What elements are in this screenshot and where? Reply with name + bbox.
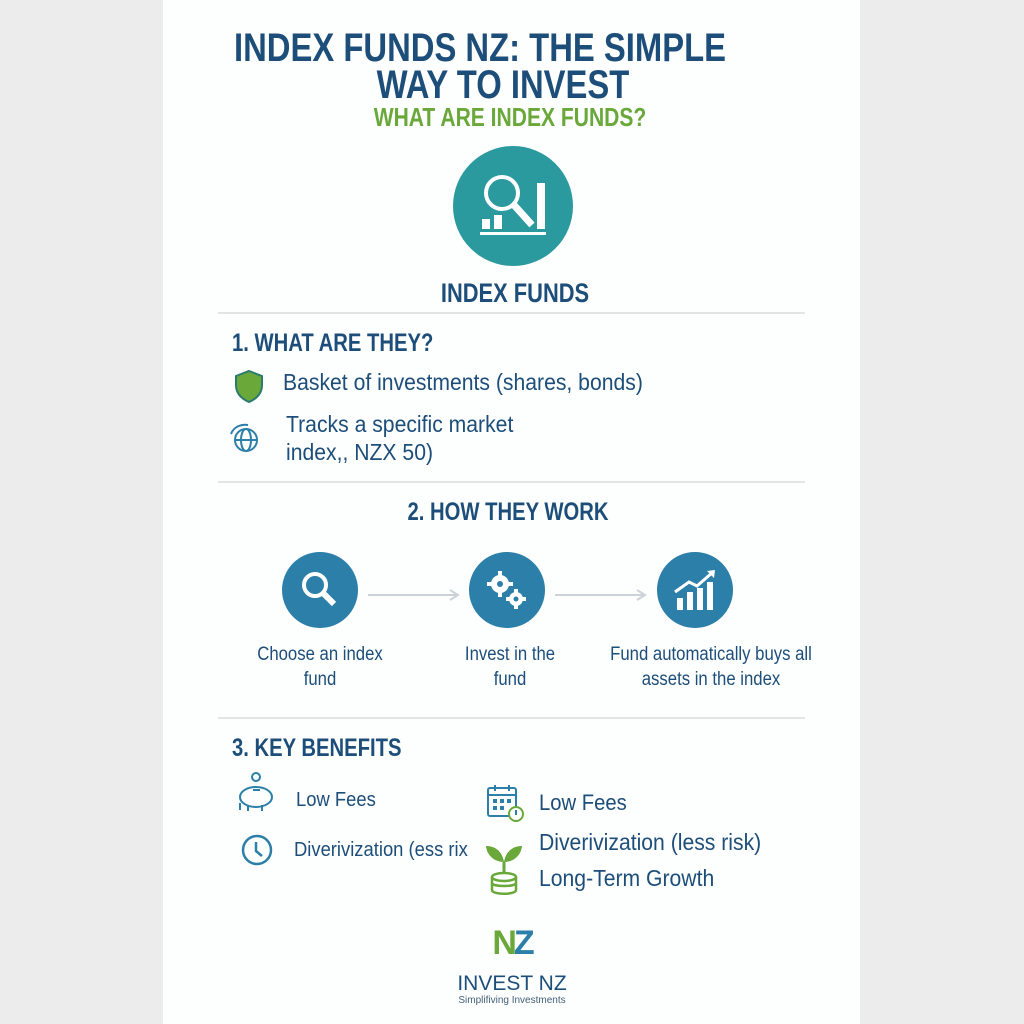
icon: globe	[230, 424, 258, 452]
card background	[163, 0, 860, 1024]
icon: magnifier	[282, 552, 358, 628]
text: long-term growth: Long-Term Growth	[539, 865, 714, 891]
step 3	[610, 552, 812, 690]
benefit: piggy low fees	[239, 772, 376, 811]
label	[257, 644, 383, 690]
text: tracks: index,, NZX 50)	[286, 439, 433, 465]
title	[234, 26, 726, 107]
label: Choose an index	[257, 644, 383, 665]
label: Invest in the	[465, 644, 555, 665]
text: Diverivization (ess rix	[294, 839, 468, 861]
icon: piggy bank	[239, 772, 273, 811]
title: INDEX FUNDS NZ: THE SIMPLE	[234, 26, 726, 70]
text: Low Fees	[296, 789, 376, 811]
arrow 1	[368, 589, 460, 601]
heading: index funds: INDEX FUNDS	[441, 278, 589, 308]
text: diversification right: Diverivization (less risk)	[539, 829, 761, 855]
icon: growth chart	[657, 552, 733, 628]
icon: shield	[235, 370, 263, 403]
benefit: calendar low fees	[487, 785, 627, 822]
benefit: clock diversification	[242, 834, 468, 866]
step 2	[465, 552, 555, 690]
icon: plant on coins	[486, 846, 522, 895]
logo	[457, 924, 567, 1006]
text: basket: Basket of investments (shares, bonds)	[283, 369, 643, 395]
arrow 2	[555, 589, 647, 601]
tagline: Simplifiving Investments	[458, 995, 566, 1006]
text: Low Fees	[539, 790, 627, 815]
label: assets in the index	[642, 669, 780, 690]
label: fund	[494, 669, 526, 690]
logo text: INVEST NZ	[457, 972, 567, 995]
text: tracks	[286, 411, 514, 465]
title: WAY TO INVEST	[377, 63, 629, 107]
icon: calendar	[487, 785, 524, 822]
label: fund	[304, 669, 336, 690]
step 1	[257, 552, 383, 690]
section 1 heading: 1. WHAT ARE THEY?	[232, 329, 433, 357]
section 3 heading: 3. KEY BENEFITS	[232, 734, 402, 762]
label: Fund automatically buys all	[610, 644, 812, 665]
subtitle: WHAT ARE INDEX FUNDS?	[374, 102, 646, 132]
text: tracks: Tracks a specific market	[286, 411, 513, 437]
label	[610, 644, 812, 690]
icon: clock	[242, 834, 272, 866]
section 2 heading: 2. HOW THEY WORK	[407, 498, 609, 526]
icon: index funds circle	[453, 146, 573, 266]
label	[465, 644, 555, 690]
logo mark: NZ	[492, 924, 532, 962]
icon: gears	[469, 552, 545, 628]
